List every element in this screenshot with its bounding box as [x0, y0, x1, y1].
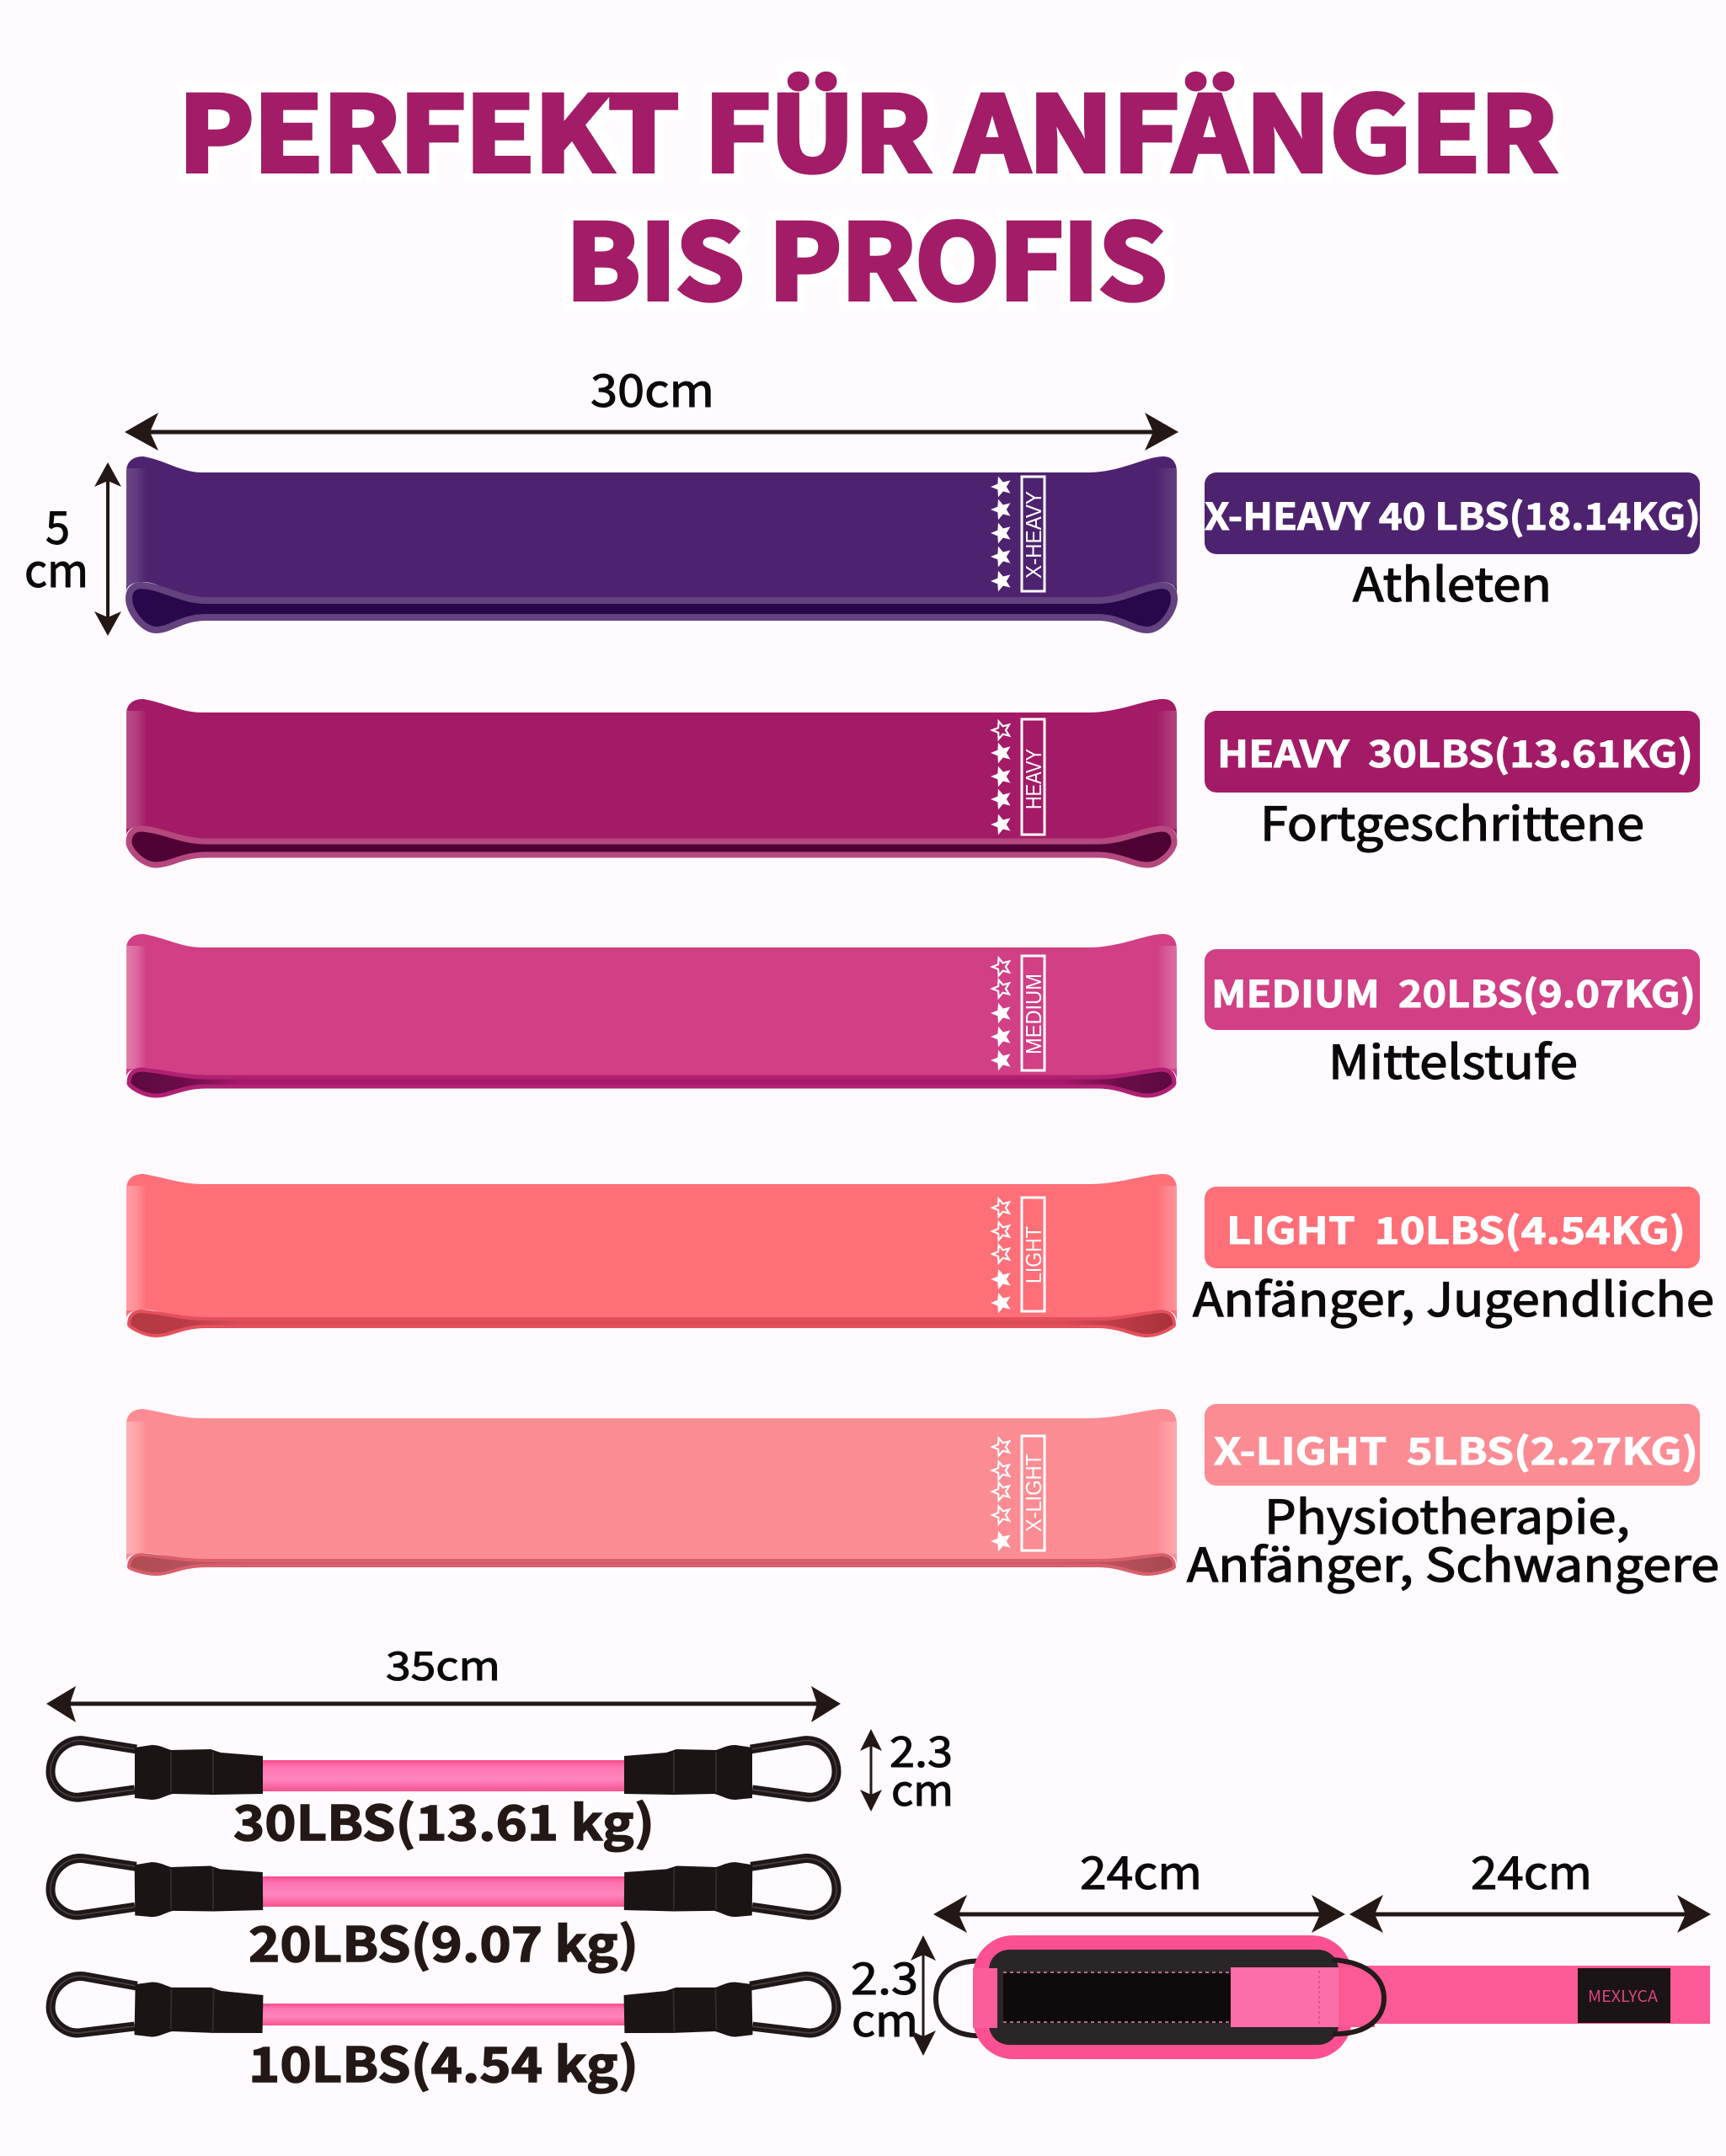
band: light	[126, 1174, 1177, 1336]
label: x-light	[1187, 1404, 1719, 1595]
webbing strap	[1339, 1966, 1710, 2024]
label: heavy: Fortgeschrittene	[1260, 787, 1644, 854]
handle tube: 10lbs	[50, 1976, 837, 2039]
label: medium: Mittelstufe	[1328, 1025, 1578, 1092]
dimension: 2.3cm cuff: cm	[852, 1986, 918, 2049]
stars	[991, 1438, 1011, 1551]
dimension: 2.3cm tube	[860, 1719, 954, 1818]
text: 20lbs: 20LBS(9.07 kg)	[248, 1907, 639, 1976]
label: light: LIGHT 10LBS(4.54KG)	[1226, 1201, 1686, 1255]
strength tag: LIGHT	[1021, 1226, 1046, 1283]
handle tube: 20lbs	[51, 1857, 836, 1918]
label: x-light: X-LIGHT 5LBS(2.27KG)	[1214, 1422, 1698, 1476]
padded cuff	[973, 1935, 1352, 2059]
ankle strap	[936, 1935, 1710, 2059]
brand label: MEXLYCA	[1588, 1984, 1658, 2007]
handle tube: 30lbs	[51, 1741, 836, 1800]
label: x-heavy: X-HEAVY 40 LBS(18.14KG)	[1205, 487, 1701, 541]
title	[179, 52, 1557, 329]
dimension: 5cm height	[24, 462, 121, 636]
strength tag	[1021, 719, 1046, 835]
dimension: 2.3cm tube: 2.3	[890, 1719, 953, 1780]
dimension: 24cm strap: 24cm	[1471, 1836, 1592, 1903]
strength tag: HEAVY	[1021, 749, 1046, 809]
stars	[991, 721, 1011, 835]
stars	[991, 958, 1011, 1070]
label: medium	[1205, 949, 1700, 1092]
stars	[991, 477, 1011, 591]
dimension: 30cm width: 30cm	[590, 354, 714, 420]
strength tag	[1021, 1198, 1046, 1311]
strength tag: X-HEAVY	[1021, 491, 1046, 579]
dimension: 24cm strap	[1349, 1836, 1711, 1933]
label: x-heavy	[1205, 472, 1701, 615]
band: medium	[126, 934, 1177, 1096]
label: light	[1193, 1187, 1714, 1330]
dimension: 2.3cm cuff	[851, 1935, 936, 2056]
brand label	[1578, 1968, 1670, 2023]
label: medium: MEDIUM 20LBS(9.07KG)	[1211, 964, 1696, 1018]
label: x-heavy: Athleten	[1353, 547, 1552, 615]
dimension: 24cm pad: 24cm	[1080, 1836, 1202, 1903]
label: x-light: Anfänger, Schwangere	[1187, 1528, 1719, 1595]
label: light: Anfänger, Jugendliche	[1193, 1262, 1714, 1330]
dimension: 24cm pad	[933, 1836, 1345, 1933]
pink tab	[1231, 1967, 1339, 2027]
label: heavy: HEAVY 30LBS(13.61KG)	[1217, 724, 1693, 778]
d-ring right	[1333, 1960, 1384, 2034]
title: BIS PROFIS	[566, 180, 1167, 329]
d-ring left	[936, 1961, 987, 2036]
band: x-light	[126, 1409, 1177, 1574]
text: 30lbs: 30LBS(13.61 kg)	[233, 1785, 655, 1854]
label: x-light: Physiotherapie,	[1264, 1480, 1630, 1547]
dimension: 2.3cm cuff: 2.3	[851, 1944, 918, 2007]
text: 10lbs: 10LBS(4.54 kg)	[248, 2027, 639, 2096]
label: heavy	[1205, 711, 1700, 854]
band: x-heavy	[126, 456, 1177, 630]
dimension: 35cm	[46, 1634, 841, 1722]
title: PERFEKT FÜR ANFÄNGER	[179, 52, 1557, 201]
strength tag: MEDIUM	[1021, 974, 1046, 1054]
strength tag: X-LIGHT	[1021, 1454, 1046, 1532]
dimension: 5cm height: 5	[45, 491, 70, 558]
dimension: 2.3cm tube: cm	[891, 1758, 954, 1818]
velcro	[1003, 1972, 1231, 2023]
band: heavy	[126, 699, 1177, 865]
dimension: 5cm height: cm	[24, 534, 88, 600]
dimension: 30cm width	[125, 354, 1178, 451]
stars	[991, 1198, 1011, 1313]
dimension: 35cm: 35cm	[386, 1634, 500, 1692]
